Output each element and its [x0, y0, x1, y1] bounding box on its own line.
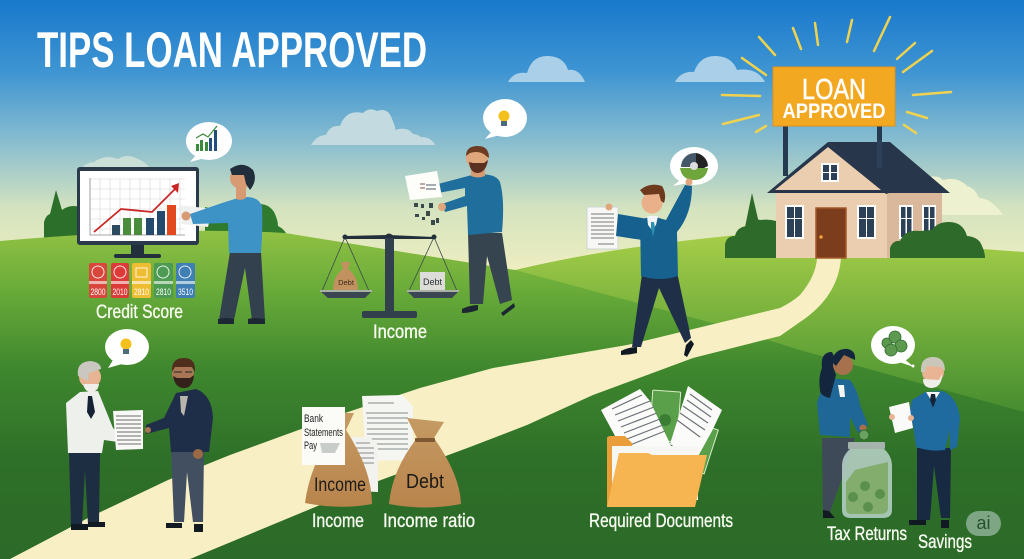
speech bubble: chart	[186, 122, 232, 162]
background bushes right	[205, 204, 288, 238]
cloud: right behind house	[925, 176, 1003, 215]
person: walking man	[606, 178, 694, 357]
front door	[816, 208, 846, 258]
cloud: top centre	[508, 56, 585, 82]
jar of money	[842, 430, 892, 518]
label: required documents: Required Documents	[589, 511, 733, 532]
document held up	[587, 207, 618, 249]
sign: loan approved: LOAN	[802, 74, 866, 106]
house roof	[767, 140, 950, 194]
hill: left main and foreground	[0, 231, 1024, 559]
speech bubble: pie chart	[670, 147, 718, 186]
note: bank statements: Bank	[304, 413, 323, 425]
sky background	[0, 0, 1024, 290]
label: tax returns: Tax Returns	[827, 524, 907, 545]
monitor with growth chart	[77, 167, 199, 258]
figure: walking man with document	[587, 147, 718, 357]
bag: income	[305, 413, 372, 507]
sign posts	[783, 124, 882, 180]
label: income: Income	[312, 511, 364, 532]
credit score badges: 3510	[178, 287, 193, 297]
sun rays	[722, 17, 951, 133]
credit score badges: 2010	[112, 287, 128, 297]
contract document	[113, 410, 143, 450]
balance scale: Debt	[423, 277, 443, 287]
folder	[607, 436, 707, 507]
sign: loan approved	[773, 67, 895, 126]
papers in folder	[601, 386, 722, 460]
gable window	[821, 163, 839, 182]
speech bubble: lightbulb	[105, 329, 149, 368]
house scene with sign	[722, 17, 985, 258]
figure: man at credit chart	[77, 122, 265, 324]
figure: debt-to-income scale	[320, 99, 527, 343]
figure: two men shaking over contract	[66, 329, 213, 532]
person: older man	[66, 361, 120, 530]
label: income: Income	[373, 322, 427, 343]
label: savings: Savings	[918, 532, 972, 553]
bag: debt	[389, 418, 461, 508]
ai badge	[966, 511, 1001, 536]
credit score badges: 2810	[156, 287, 171, 297]
figure: required documents folder	[589, 386, 733, 532]
figure: documents and money bags	[302, 395, 475, 532]
person: woman	[817, 349, 868, 518]
money notes in folder	[649, 390, 718, 474]
credit score badges	[89, 263, 195, 298]
house walls	[776, 191, 942, 258]
hill: far right light	[515, 233, 1024, 559]
person: credit analyst	[180, 165, 265, 324]
cloud: left	[80, 156, 152, 172]
credit score badges: 2800	[90, 287, 106, 297]
label: credit score: Credit Score	[96, 302, 183, 323]
balance scale: Debt	[338, 278, 355, 287]
balance scale	[320, 234, 459, 318]
house windows	[785, 205, 936, 239]
person: man in suit	[145, 358, 213, 532]
title: TIPS LOAN APPROVED	[37, 22, 427, 78]
note: bank statements	[302, 407, 345, 465]
shrubs by the house	[725, 193, 985, 258]
person: man shredding paper	[405, 146, 515, 316]
speech bubble: coins	[871, 326, 915, 368]
ai badge: ai	[976, 513, 991, 533]
bag: debt: Debt	[406, 471, 444, 493]
cloud: top right	[675, 56, 765, 82]
person: older man with form	[889, 357, 960, 528]
speech bubble: lightbulb	[483, 99, 527, 139]
background tree and bushes left	[44, 190, 80, 242]
label: income ratio: Income ratio	[383, 511, 475, 532]
cloud: centre	[311, 109, 435, 145]
note: bank statements: Pay	[304, 440, 317, 452]
winding path to the house	[10, 258, 841, 559]
paper stack behind bags	[350, 395, 413, 492]
sign: loan approved: APPROVED	[782, 100, 886, 123]
figure: savings jar and couple	[817, 326, 972, 553]
note: bank statements: Statements	[304, 427, 343, 439]
credit score badges: 2810	[134, 287, 149, 297]
bag: income: Income	[314, 475, 366, 496]
